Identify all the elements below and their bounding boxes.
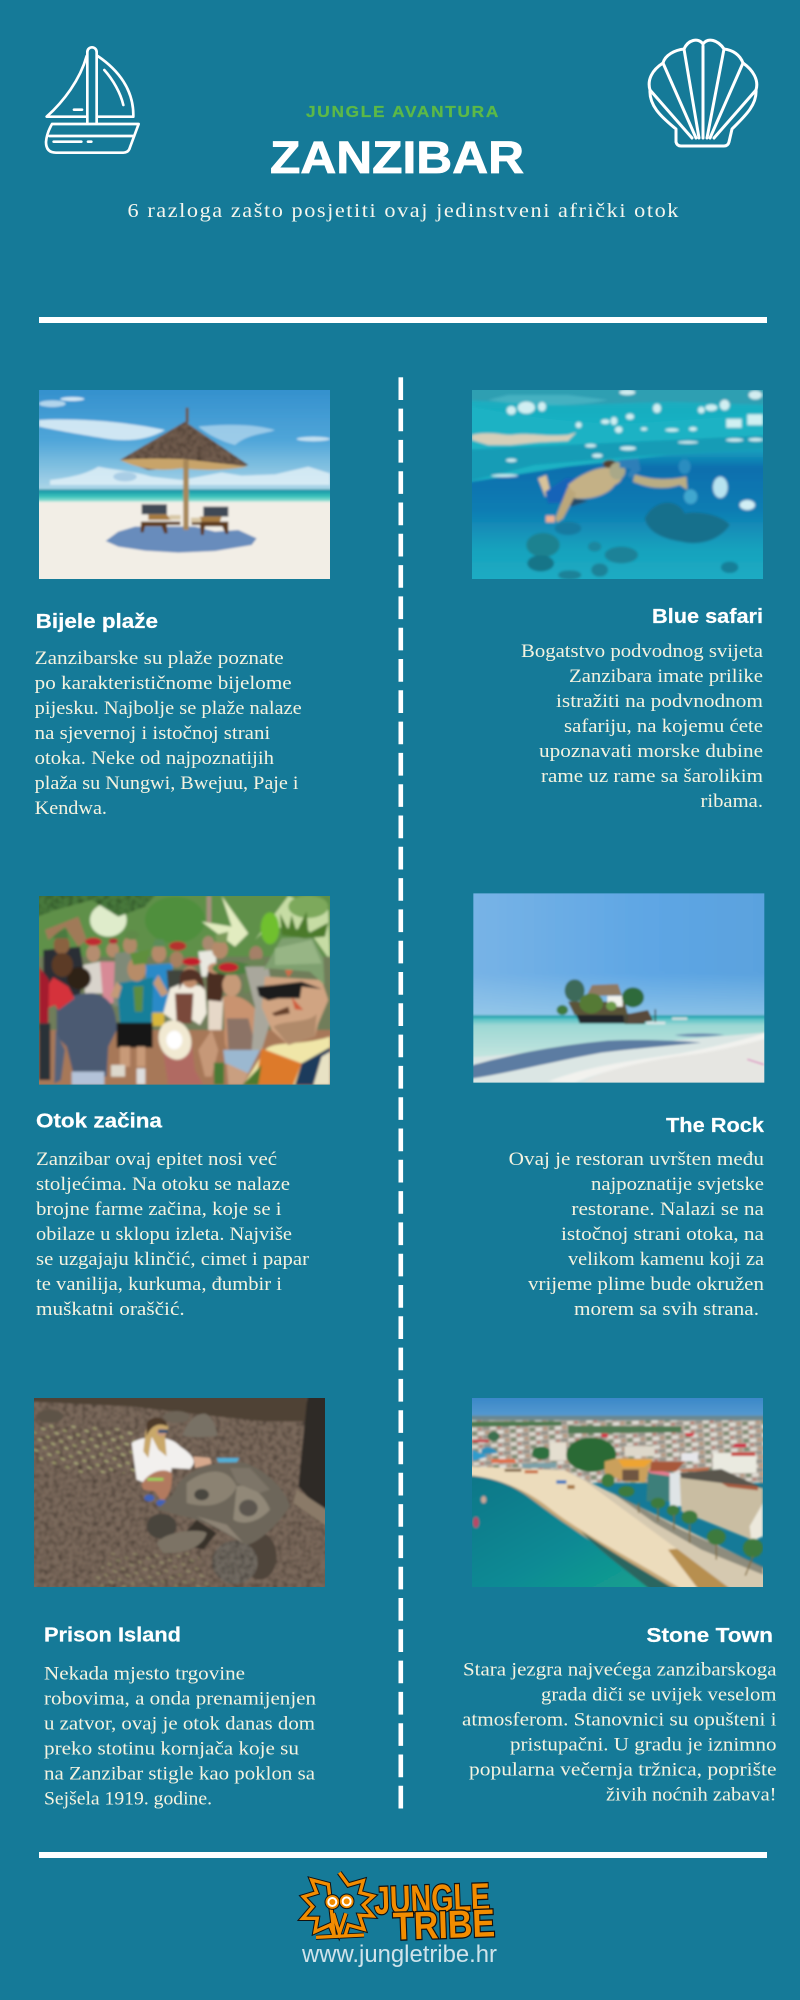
text block <box>462 1660 777 1806</box>
photo: giant tortoise <box>34 1398 325 1587</box>
panel: Prison Island <box>23 1386 337 1810</box>
icon: spiky owl mascot <box>303 1873 373 1937</box>
text block: pristupačni. U gradu je iznimno <box>510 1735 776 1756</box>
bottom divider <box>39 1852 767 1858</box>
photo: snorkeler <box>472 390 763 579</box>
selfie man <box>243 1037 330 1085</box>
text block: Zanzibara imate prilike <box>569 666 763 687</box>
logo: Jungle Tribe <box>303 1873 496 1949</box>
logo wordmark <box>373 1876 496 1949</box>
heading: Prison Island <box>44 1625 181 1647</box>
text block: stoljećima. Na otoku se nalaze <box>36 1174 290 1195</box>
photo: aerial of Stone Town <box>472 1398 763 1587</box>
text block <box>35 648 302 819</box>
text block: na sjevernoj i istočnoj strani <box>35 723 270 744</box>
white jacket woman <box>163 983 207 1025</box>
text block: plaža su Nungwi, Bwejuu, Paje i <box>35 773 298 794</box>
back row <box>43 917 265 1026</box>
logo wordmark: TRIBE <box>392 1902 496 1949</box>
text block: grada diči se uvijek veselom <box>541 1685 777 1706</box>
text block: istočnoj strani otoka, na <box>561 1224 765 1245</box>
heading: Blue safari <box>652 606 763 628</box>
panel: Bijele plaze <box>28 378 342 819</box>
photo: rock restaurant <box>473 893 764 1083</box>
text block <box>36 1149 310 1320</box>
text block: brojne farme začina, koje se i <box>36 1199 282 1220</box>
brand label: JUNGLE AVANTURA <box>306 104 500 121</box>
text block: Stara jezgra najvećega zanzibarskoga <box>463 1660 777 1681</box>
text block: morem sa svih strana. <box>574 1299 759 1320</box>
heading: Bijele plaže <box>36 611 158 633</box>
photo: beach umbrella <box>39 390 330 579</box>
panel: Stone Town <box>461 1386 777 1806</box>
website url: www.jungletribe.hr <box>301 1941 497 1968</box>
heading: Otok začina <box>36 1111 163 1133</box>
text block: najpoznatije svjetske <box>591 1174 764 1195</box>
text block: Bogatstvo podvodnog svijeta <box>521 641 764 662</box>
heading: Stone Town <box>646 1625 773 1647</box>
text block: obilaze u sklopu izleta. Najviše <box>36 1224 292 1245</box>
center man <box>117 977 153 1025</box>
text block: se uzgajaju klinčić, cimet i papar <box>36 1249 310 1270</box>
bald man <box>57 993 117 1077</box>
text block: na Zanzibar stigle kao poklon sa <box>44 1764 316 1785</box>
panel: Blue safari <box>472 390 763 807</box>
red jersey <box>52 953 73 977</box>
photo: tour group <box>39 896 330 1085</box>
text block: muškatni oraščić. <box>36 1299 185 1320</box>
text block: po karakterističnome bijelome <box>35 673 292 694</box>
text block: Nekada mjesto trgovine <box>44 1664 245 1685</box>
text block: atmosferom. Stanovnici su opušteni i <box>462 1710 776 1731</box>
text block: Zanzibar ovaj epitet nosi već <box>36 1149 277 1170</box>
text block <box>44 1664 317 1810</box>
text block <box>509 1149 765 1320</box>
text block: rame uz rame sa šarolikim <box>541 766 763 787</box>
text block: istražiti na podvnodnom <box>556 691 763 712</box>
text block: živih noćnih zabava! <box>606 1785 776 1806</box>
text block: robovima, a onda prenamijenjen <box>44 1689 317 1710</box>
logo wordmark: JUNGLE <box>373 1876 491 1923</box>
text block: upoznavati morske dubine <box>539 741 763 762</box>
text block: te vanilija, kurkuma, đumbir i <box>36 1274 282 1295</box>
third row women <box>208 997 223 1030</box>
top divider <box>39 317 767 323</box>
heading: The Rock <box>666 1115 765 1137</box>
text block: Kendwa. <box>35 798 107 819</box>
text block: preko stotinu kornjača koje su <box>44 1739 300 1760</box>
title: ZANZIBAR <box>270 132 524 183</box>
text block: Sejšela 1919. godine. <box>44 1789 212 1810</box>
panel: The Rock <box>473 893 764 1315</box>
text block <box>521 641 764 812</box>
center dashed line <box>398 377 403 1808</box>
text block: popularna večernja tržnica, poprište <box>469 1760 776 1781</box>
text block: Zanzibarske su plaže poznate <box>35 648 284 669</box>
text block: restorane. Nalazi se na <box>571 1199 765 1220</box>
icon: sailboat <box>46 47 139 153</box>
text block: safariju, na kojemu ćete <box>564 716 763 737</box>
text block: Ovaj je restoran uvršten među <box>509 1149 765 1170</box>
icon: seashell <box>649 40 757 146</box>
panel: Otok zacina <box>28 883 342 1320</box>
text block: u zatvor, ovaj je otok danas dom <box>44 1714 315 1735</box>
text block: otoka. Neke od najpoznatijih <box>35 748 275 769</box>
text block: pijesku. Najbolje se plaže nalaze <box>35 698 302 719</box>
text block: ribama. <box>700 791 763 812</box>
text block: vrijeme plime bude okružen <box>528 1274 765 1295</box>
subtitle: 6 razloga zašto posjetiti ovaj jedinstveni afrički otok <box>128 200 680 222</box>
text block: velikom kamenu koji za <box>568 1249 765 1270</box>
